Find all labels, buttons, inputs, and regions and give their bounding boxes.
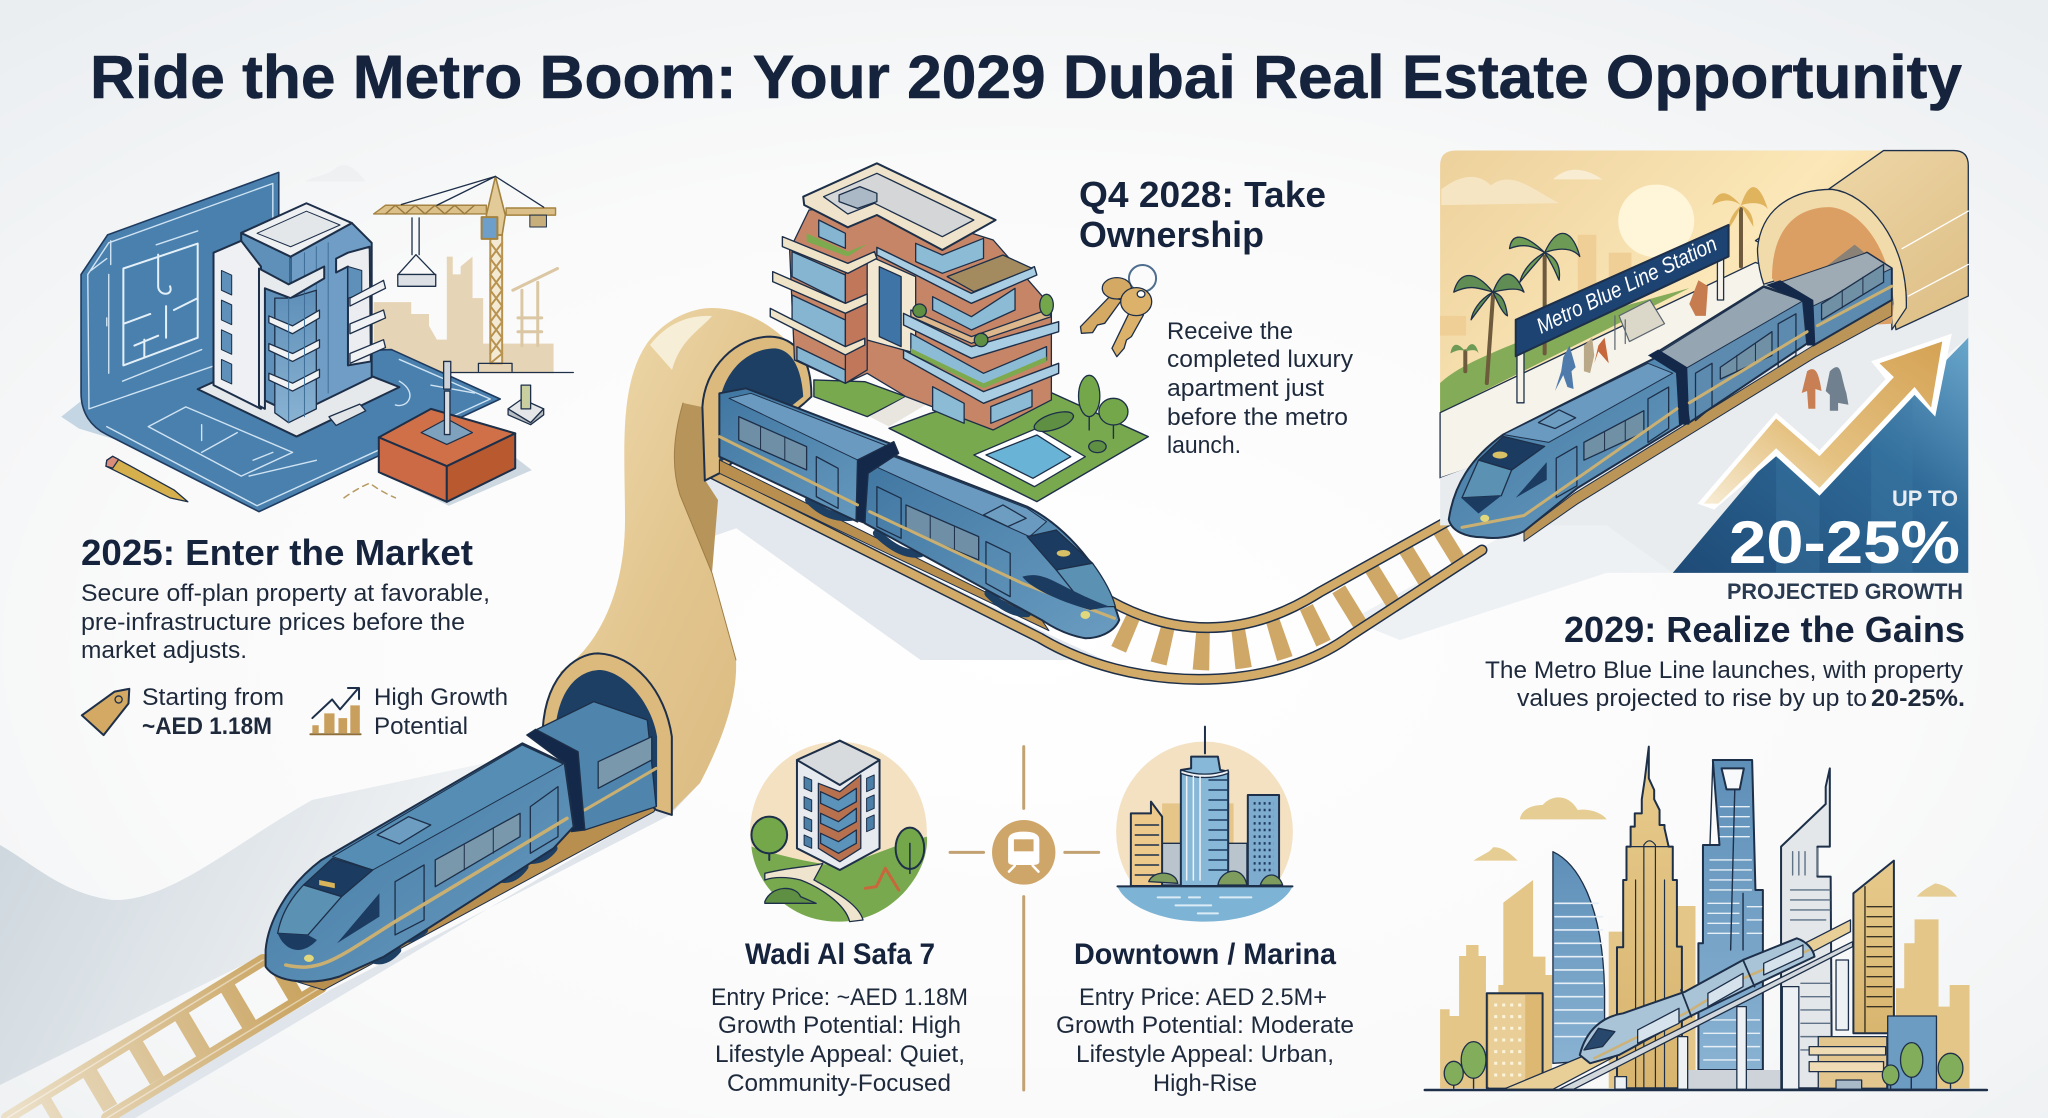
gold stripe (1462, 286, 1892, 527)
blue low building (1888, 1016, 1936, 1089)
sun (1618, 185, 1694, 257)
roofs (1503, 363, 1673, 442)
text: Q4 2028 body: apartment just (1167, 375, 1324, 402)
icon: Wadi Al Safa neighbourhood (750, 741, 927, 922)
text: 2029 body: 20-25%. (1871, 685, 1965, 712)
lamp low (1480, 515, 1489, 522)
label: 20-25%: 20-25% (1729, 509, 1960, 576)
nose cap (304, 858, 373, 897)
train: station (1449, 151, 1968, 541)
white tower lines (1791, 848, 1831, 1050)
side window (1022, 575, 1110, 610)
third balcony (904, 350, 1059, 403)
small tools (344, 483, 395, 498)
lawn (889, 385, 1148, 502)
balcony bands (1809, 1047, 1886, 1072)
cloud (304, 165, 366, 182)
heading: 2025: 2025: Enter the Market (81, 532, 473, 573)
deck (719, 460, 1049, 631)
tunnel mouth (542, 653, 672, 815)
track shadow upper (1350, 296, 1968, 640)
text: 2025 body (81, 580, 490, 664)
ground floor glass (933, 387, 1032, 423)
people group (1555, 345, 1576, 391)
windshield lower (1461, 496, 1501, 514)
text: starting price: Starting from (142, 684, 284, 711)
doors (1556, 314, 1796, 498)
growth area (1673, 338, 1968, 573)
gangway (856, 442, 899, 523)
heading: 2029: 2029: Realize the Gains (1564, 609, 1965, 650)
gold tower stripes (1865, 887, 1892, 1033)
train: middle (719, 388, 1119, 638)
text: Wadi details: Community-Focused (727, 1070, 951, 1097)
window dividers (1605, 277, 1863, 450)
low tan building (1818, 1037, 1887, 1088)
text: Wadi details: Growth Potential: High (718, 1012, 961, 1039)
text: 2029 body: values projected to rise by up to (1517, 685, 1867, 712)
windshield lower (278, 933, 317, 950)
icon: keys (1080, 265, 1156, 357)
hatch (1538, 410, 1576, 429)
third floor glass (911, 333, 1047, 387)
lamps (1493, 451, 1507, 459)
cap (1479, 436, 1545, 470)
text: Wadi details: Entry Price: ~AED 1.18M (711, 984, 968, 1011)
track shadow lower (110, 783, 700, 1118)
monorail train (1580, 938, 1815, 1063)
pathway (870, 397, 925, 427)
left balconies (770, 237, 877, 355)
windows (435, 813, 520, 887)
viaduct deck (1503, 920, 1850, 1089)
left glass floors (792, 220, 845, 383)
icon: growth chart (310, 688, 361, 734)
tower center fold (1710, 760, 1743, 950)
station sign (1516, 225, 1729, 356)
track: lower left (7, 960, 321, 1118)
roof (803, 163, 996, 250)
pencil (106, 456, 188, 502)
compare section (750, 727, 1293, 1090)
label: projected growth: PROJECTED GROWTH (1727, 579, 1963, 604)
platform (1440, 262, 1892, 478)
person far (1689, 280, 1708, 316)
roof inner (824, 173, 974, 237)
brick column (845, 263, 867, 383)
text: growth potential (374, 684, 508, 740)
front car (1449, 357, 1681, 538)
windshield (1056, 563, 1115, 607)
rear car (719, 388, 894, 522)
text: 2025 body: Secure off-plan property at favorable, (81, 580, 490, 607)
tunnel ribbon (560, 308, 800, 813)
tunnel shadow (1813, 245, 1894, 320)
people group (1584, 338, 1594, 373)
low door (1836, 1080, 1862, 1089)
building walls (790, 203, 1051, 430)
tunnel inside (1772, 207, 1894, 328)
text: Downtown details: Growth Potential: Moderate (1056, 1012, 1354, 1039)
white tower (1781, 768, 1832, 1088)
upper glass (916, 238, 984, 273)
text: Wadi details (711, 984, 968, 1097)
windshield (1462, 460, 1512, 498)
wheels (371, 848, 554, 960)
building model (198, 203, 399, 437)
tower lines (1704, 807, 1762, 1060)
centre core (867, 255, 916, 353)
roof terrace green (807, 233, 867, 257)
people group (1594, 338, 1609, 363)
lamp low (304, 955, 314, 962)
gold spire tower (1617, 747, 1682, 1088)
windows (1584, 264, 1884, 460)
right balcony (904, 313, 1059, 358)
label: up to: UP TO (1892, 486, 1958, 511)
shrub small (1089, 441, 1106, 453)
pool (974, 428, 1085, 487)
panel: 2025 illustration (61, 165, 573, 512)
lamp (319, 880, 335, 888)
tall blue tower (1698, 760, 1763, 1070)
ground (1440, 288, 1689, 413)
body (266, 743, 574, 982)
gangway (527, 729, 585, 832)
balcony plant left (913, 304, 926, 317)
tower crane (374, 176, 573, 372)
couple (1802, 367, 1848, 411)
windows (739, 417, 979, 560)
ground line (1425, 1089, 1987, 1091)
window dividers (761, 427, 954, 550)
text: Q4 2028 body: launch. (1167, 432, 1241, 459)
rear car (536, 702, 656, 830)
curved blue tower (1553, 852, 1605, 1063)
clouds (1474, 797, 1957, 897)
train windows (1584, 1028, 1615, 1050)
trees (1444, 1042, 1963, 1088)
text: Q4 2028 body: completed luxury (1167, 346, 1353, 373)
roof middle (1658, 287, 1803, 371)
tube highlight (1902, 211, 1968, 296)
heading: Wadi Al Safa 7: Wadi Al Safa 7 (745, 938, 935, 971)
rear stripe (585, 768, 656, 810)
third floor green (911, 348, 1047, 388)
low building dots (1494, 1005, 1522, 1075)
pool water (986, 435, 1071, 478)
text: Q4 2028 body: Receive the (1167, 318, 1293, 345)
entrance glass (879, 267, 901, 347)
icon: metro badge (992, 820, 1055, 885)
distant skyline (1440, 235, 1631, 336)
train windows side (1638, 945, 1803, 1043)
gold wedge tower (1853, 861, 1894, 1033)
gold stripe (719, 437, 1114, 618)
station label: Metro Blue Line Station (1532, 231, 1721, 339)
headlamps (1057, 550, 1070, 557)
text: 2025 body: market adjusts. (81, 637, 247, 664)
heading: Q4 2028: Ownership (1079, 214, 1264, 255)
tunnel arch (1758, 189, 1906, 330)
text: growth potential: High Growth (374, 684, 508, 711)
text: Downtown details: Entry Price: AED 2.5M+ (1079, 984, 1327, 1011)
growth bars tone (1776, 399, 1912, 573)
text: 2029 body (1485, 657, 1965, 712)
gold stripe (286, 818, 567, 967)
lower platform (1440, 296, 1968, 573)
doors (816, 457, 1010, 597)
window dividers (464, 828, 493, 870)
growth chart block (1673, 334, 1968, 573)
rear car (1797, 253, 1892, 345)
track shadow middle (683, 470, 1105, 660)
train gold stripe (1594, 950, 1809, 1058)
wheels (809, 500, 1027, 613)
rear car window (598, 737, 652, 788)
roofs (729, 393, 1047, 537)
divider (950, 747, 1099, 1090)
icon: price tag (82, 689, 129, 735)
text: Downtown details: Lifestyle Appeal: Urban, (1076, 1041, 1334, 1068)
tower aperture (1722, 768, 1744, 789)
low building front (1489, 995, 1525, 1088)
spire inner lines (1631, 841, 1668, 1088)
viaduct pillars (1615, 960, 1848, 1089)
text: Downtown details: High-Rise (1153, 1070, 1257, 1097)
roof (333, 745, 563, 870)
heading: Q4 2028 (1079, 174, 1326, 255)
train: lower left (266, 653, 672, 990)
balcony plant small (974, 333, 988, 347)
roof rear (1780, 253, 1892, 306)
text: Downtown details (1056, 984, 1354, 1097)
roof hatch (984, 505, 1026, 527)
viaduct underside (1559, 942, 1853, 1089)
skyline illustration (1425, 747, 1987, 1090)
windshield (278, 885, 341, 935)
roof box (839, 187, 877, 208)
base plinth (1687, 1070, 1780, 1089)
growth arrow (1704, 342, 1942, 504)
shrub (1030, 408, 1078, 435)
palm trees (1450, 187, 1768, 383)
tunnel mouth: middle (702, 337, 811, 481)
side window (337, 893, 379, 943)
balcony plant (1040, 294, 1053, 316)
tunnel dark (555, 670, 657, 830)
cloud small (1553, 170, 1603, 179)
tunnel tube (1755, 151, 1968, 330)
icon: Downtown Marina (1116, 727, 1293, 922)
apartment building (770, 163, 1148, 502)
heading: Downtown / Marina: Downtown / Marina (1074, 938, 1336, 971)
title: Ride the Metro Boom: Your 2029 Dubai Real Estate Opportunity (90, 43, 1962, 111)
right wing glass (933, 288, 1015, 330)
roof terrace deck (947, 255, 1032, 292)
bench (1615, 300, 1665, 349)
background hill (0, 760, 500, 1085)
gangways (1648, 280, 1815, 425)
panel: 2029 station scene (1440, 151, 1968, 573)
text: starting price (142, 684, 284, 740)
upper right band (877, 247, 1037, 303)
hatch (377, 817, 431, 844)
tan background (1440, 880, 1970, 1088)
text: 2025 body: pre-infrastructure prices before the (81, 609, 465, 636)
text: Q4 2028 body: before the metro (1167, 404, 1348, 431)
text: starting price: ~AED 1.18M (142, 713, 272, 740)
tan site silhouette (374, 257, 554, 373)
side window (1516, 462, 1547, 498)
brick block with anchor (379, 361, 544, 506)
sky (1440, 151, 1968, 478)
text: growth potential: Potential (374, 713, 468, 740)
sign posts (1517, 257, 1724, 403)
headlamp low (1080, 611, 1090, 619)
text: 2029 body: The Metro Blue Line launches, with property (1485, 657, 1963, 684)
right balcony tan (911, 310, 1051, 343)
nose cap (1027, 530, 1093, 570)
deck (1524, 300, 1892, 541)
doors (395, 787, 558, 935)
trees (1079, 375, 1128, 438)
front car (865, 455, 1119, 638)
blueprint sheet (61, 172, 500, 512)
lawn left (814, 380, 906, 417)
cloud (1441, 177, 1559, 205)
track: curved centre (705, 470, 1482, 679)
text: Q4 2028 body (1167, 318, 1353, 459)
text: Wadi details: Lifestyle Appeal: Quiet, (715, 1041, 965, 1068)
train joints (1681, 960, 1755, 1017)
distant scaffold (513, 269, 558, 346)
low gold building (1487, 993, 1543, 1088)
heading: Q4 2028: Q4 2028: Take (1079, 174, 1326, 215)
growth arrow outline (1698, 334, 1952, 510)
tower lines (1555, 903, 1603, 1037)
deck (286, 807, 656, 990)
middle car (1658, 286, 1807, 423)
